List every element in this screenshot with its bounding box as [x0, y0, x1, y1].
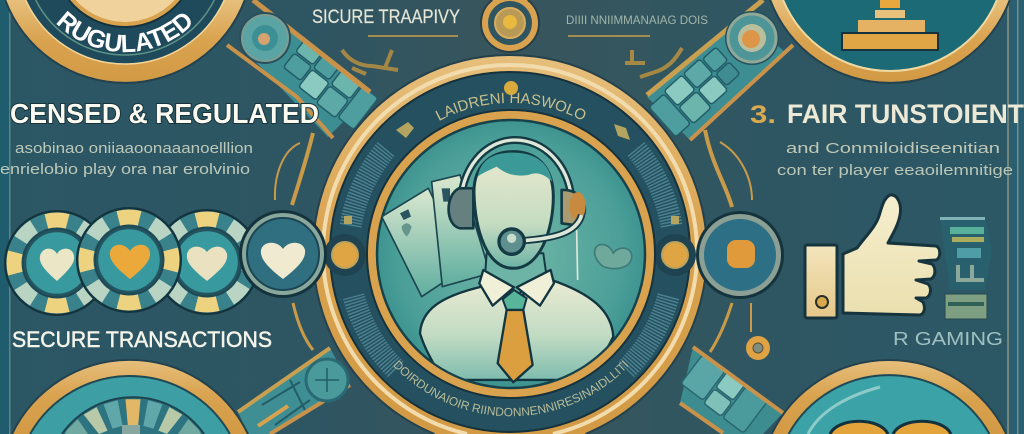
node: top centre: [481, 0, 539, 52]
torso: [420, 280, 613, 380]
neck: [485, 253, 547, 297]
coin on ring top: [504, 81, 518, 95]
ring hatching: [350, 149, 672, 369]
node: top right: [725, 11, 779, 65]
heading: licensed and regulated: CENSED & REGULATED: [10, 98, 319, 129]
connector: bottom right: [680, 347, 783, 434]
gold flourishes: [275, 36, 752, 352]
circle badge: gold rings: [772, 360, 1006, 434]
badge label: rugulated: RUGULATED: [56, 10, 191, 52]
body text: fair line 1: and Conmiloidiseenitian: [786, 140, 1000, 157]
poker chips: [5, 208, 327, 315]
headset cord: [576, 230, 578, 280]
head and hair: [474, 152, 553, 268]
circle badge: regulated: [4, 0, 246, 84]
chip 2: [77, 208, 181, 312]
icon: thumbs up: [805, 195, 940, 318]
body text: fair line 2: con ter player eeaoilemnitige: [777, 162, 1013, 179]
icon: trophy base: [842, 0, 938, 50]
node: top left: [239, 12, 291, 64]
heading: secure trading top: SICURE TRAAPIVY: [312, 7, 460, 28]
small coin: [746, 336, 770, 360]
tie: [503, 290, 527, 310]
heading: secure transactions: SECURE TRANSACTIONS: [12, 327, 272, 352]
body text: licensed line 2: enrielobio play ora nar erolvinio: [0, 161, 250, 178]
ring text: top: LAIDRENI HASWOLO: [435, 92, 586, 121]
stones: top right: [648, 46, 744, 138]
icon: headset: [449, 140, 586, 254]
circle badge: roulette: [12, 360, 248, 434]
ring gold marks: [344, 122, 679, 224]
chip 3: [155, 210, 259, 314]
small text: fair gaming: R GAMING: [893, 329, 1003, 349]
icon: playing cards: [382, 175, 490, 297]
agent figure: [382, 140, 632, 382]
button: right coin: [696, 211, 784, 299]
outer gold ring: [313, 55, 707, 434]
side studs: [324, 234, 366, 276]
icon: gold shapes: [830, 421, 951, 434]
stones: top left: [278, 39, 380, 131]
ring text: bottom: DOIRDUNAIOIR RIINDONNENNIRESINAIDLLITI: [393, 360, 628, 416]
heading: fair tournament: FAIR TUNSTOIENT: [787, 99, 1024, 129]
inner disc: [367, 110, 655, 398]
icon: roulette wheel: [62, 397, 204, 434]
small text: top right: DIIII NNIIMMANAIAG DOIS: [566, 13, 708, 27]
shirt collar: [479, 270, 514, 306]
icon: heart: [595, 245, 632, 269]
button: heart left: [239, 210, 327, 298]
large central medallion: [314, 54, 706, 434]
heading: number three: 3.: [750, 101, 776, 129]
stones: bottom right: [680, 353, 768, 433]
body text: licensed line 1: asobinao oniiaaoonaaanoelllion: [15, 140, 253, 157]
connector: bottom left: [238, 348, 350, 434]
connector: top right: [647, 0, 793, 140]
icon: slot device: [940, 217, 992, 319]
connector: top left: [227, 0, 380, 138]
circle badge: trophy: [770, 0, 1010, 83]
chip 1: [5, 211, 109, 315]
